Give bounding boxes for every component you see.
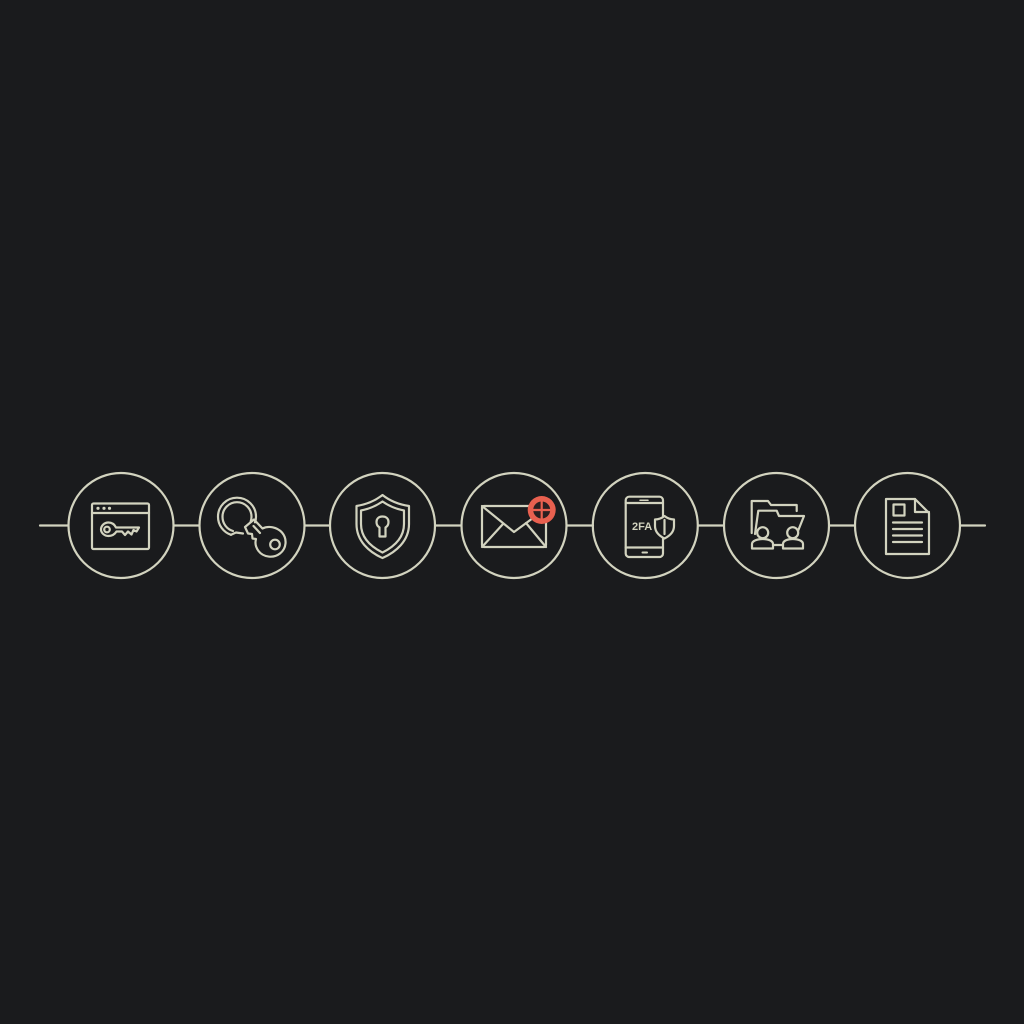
user left: [752, 527, 773, 548]
node 4: envelope with alert badge: [462, 473, 566, 578]
node 7: document: [855, 473, 960, 578]
node 1: browser with key: [68, 473, 174, 578]
node 5: phone with 2FA shield: [593, 473, 698, 578]
alert badge: [528, 496, 556, 524]
node 2: key ring: [200, 473, 304, 578]
node 3: shield with keyhole: [330, 473, 435, 578]
user right: [783, 527, 803, 548]
node 5: phone with 2FA shield: 2FA: [632, 521, 652, 533]
connector line: [40, 524, 985, 527]
node 6: shared folder with users: [724, 473, 829, 578]
